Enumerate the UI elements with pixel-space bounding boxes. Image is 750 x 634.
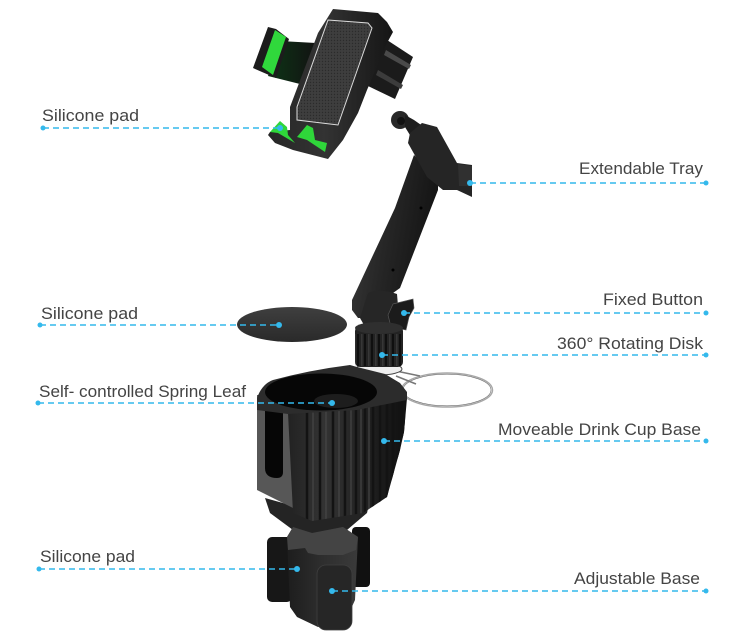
callout: silicone pad top: [40, 107, 283, 131]
base body: [287, 527, 358, 627]
cup opening: [265, 374, 377, 410]
cup ribs: [307, 395, 404, 525]
adjustable base: [267, 527, 370, 630]
fixed button: [388, 299, 414, 330]
cup rim: [257, 365, 407, 414]
left clamp arm: [253, 27, 316, 85]
carbon neck: [265, 498, 370, 538]
callout: adjustable base: Adjustable Base: [574, 570, 700, 588]
ball joint: [391, 111, 409, 129]
callout: silicone pad base: [36, 548, 300, 572]
callout: fixed button: [401, 291, 708, 316]
green silicone grip left: [262, 30, 286, 75]
textured back plate: [297, 20, 372, 125]
callout: rotating disk: [379, 335, 708, 358]
callout: extendable tray: [467, 160, 708, 186]
right clamp arm: [366, 40, 413, 99]
metal ring holder: [396, 371, 492, 407]
extendable tray: [408, 123, 472, 197]
callout: silicone pad disc: Silicone pad: [41, 305, 138, 323]
360 rotating disk: [355, 322, 403, 375]
telescopic arm: [352, 111, 472, 332]
callout: fixed button: Fixed Button: [603, 291, 703, 309]
front pad: [317, 565, 352, 630]
cup ribbed body: [288, 398, 407, 521]
bottom green silicone pads: [270, 121, 327, 152]
side silicone pads: [267, 537, 292, 602]
callout: silicone pad base: Silicone pad: [40, 548, 135, 566]
callout: silicone pad top: Silicone pad: [42, 107, 139, 125]
callout: adjustable base: [329, 570, 708, 594]
callout: spring leaf: Self- controlled Spring Leaf: [39, 383, 246, 401]
callout: spring leaf: [36, 383, 335, 406]
callout: moveable drink cup base: [381, 421, 708, 444]
knurled collar: [287, 527, 358, 555]
callout: rotating disk: 360° Rotating Disk: [557, 335, 704, 353]
callout: extendable tray: Extendable Tray: [579, 160, 704, 178]
cup left panel: [257, 395, 300, 515]
phone holder: [253, 9, 413, 159]
elbow joint: [360, 291, 398, 332]
arm shaft: [352, 155, 438, 318]
adhesive disc: [237, 307, 347, 342]
callout: silicone pad disc: [38, 305, 282, 328]
drink cup base: [257, 365, 407, 525]
green silicone grip right: [366, 40, 385, 82]
callout: moveable drink cup base: Moveable Drink Cup Base: [498, 421, 701, 439]
holder body: [268, 9, 393, 159]
